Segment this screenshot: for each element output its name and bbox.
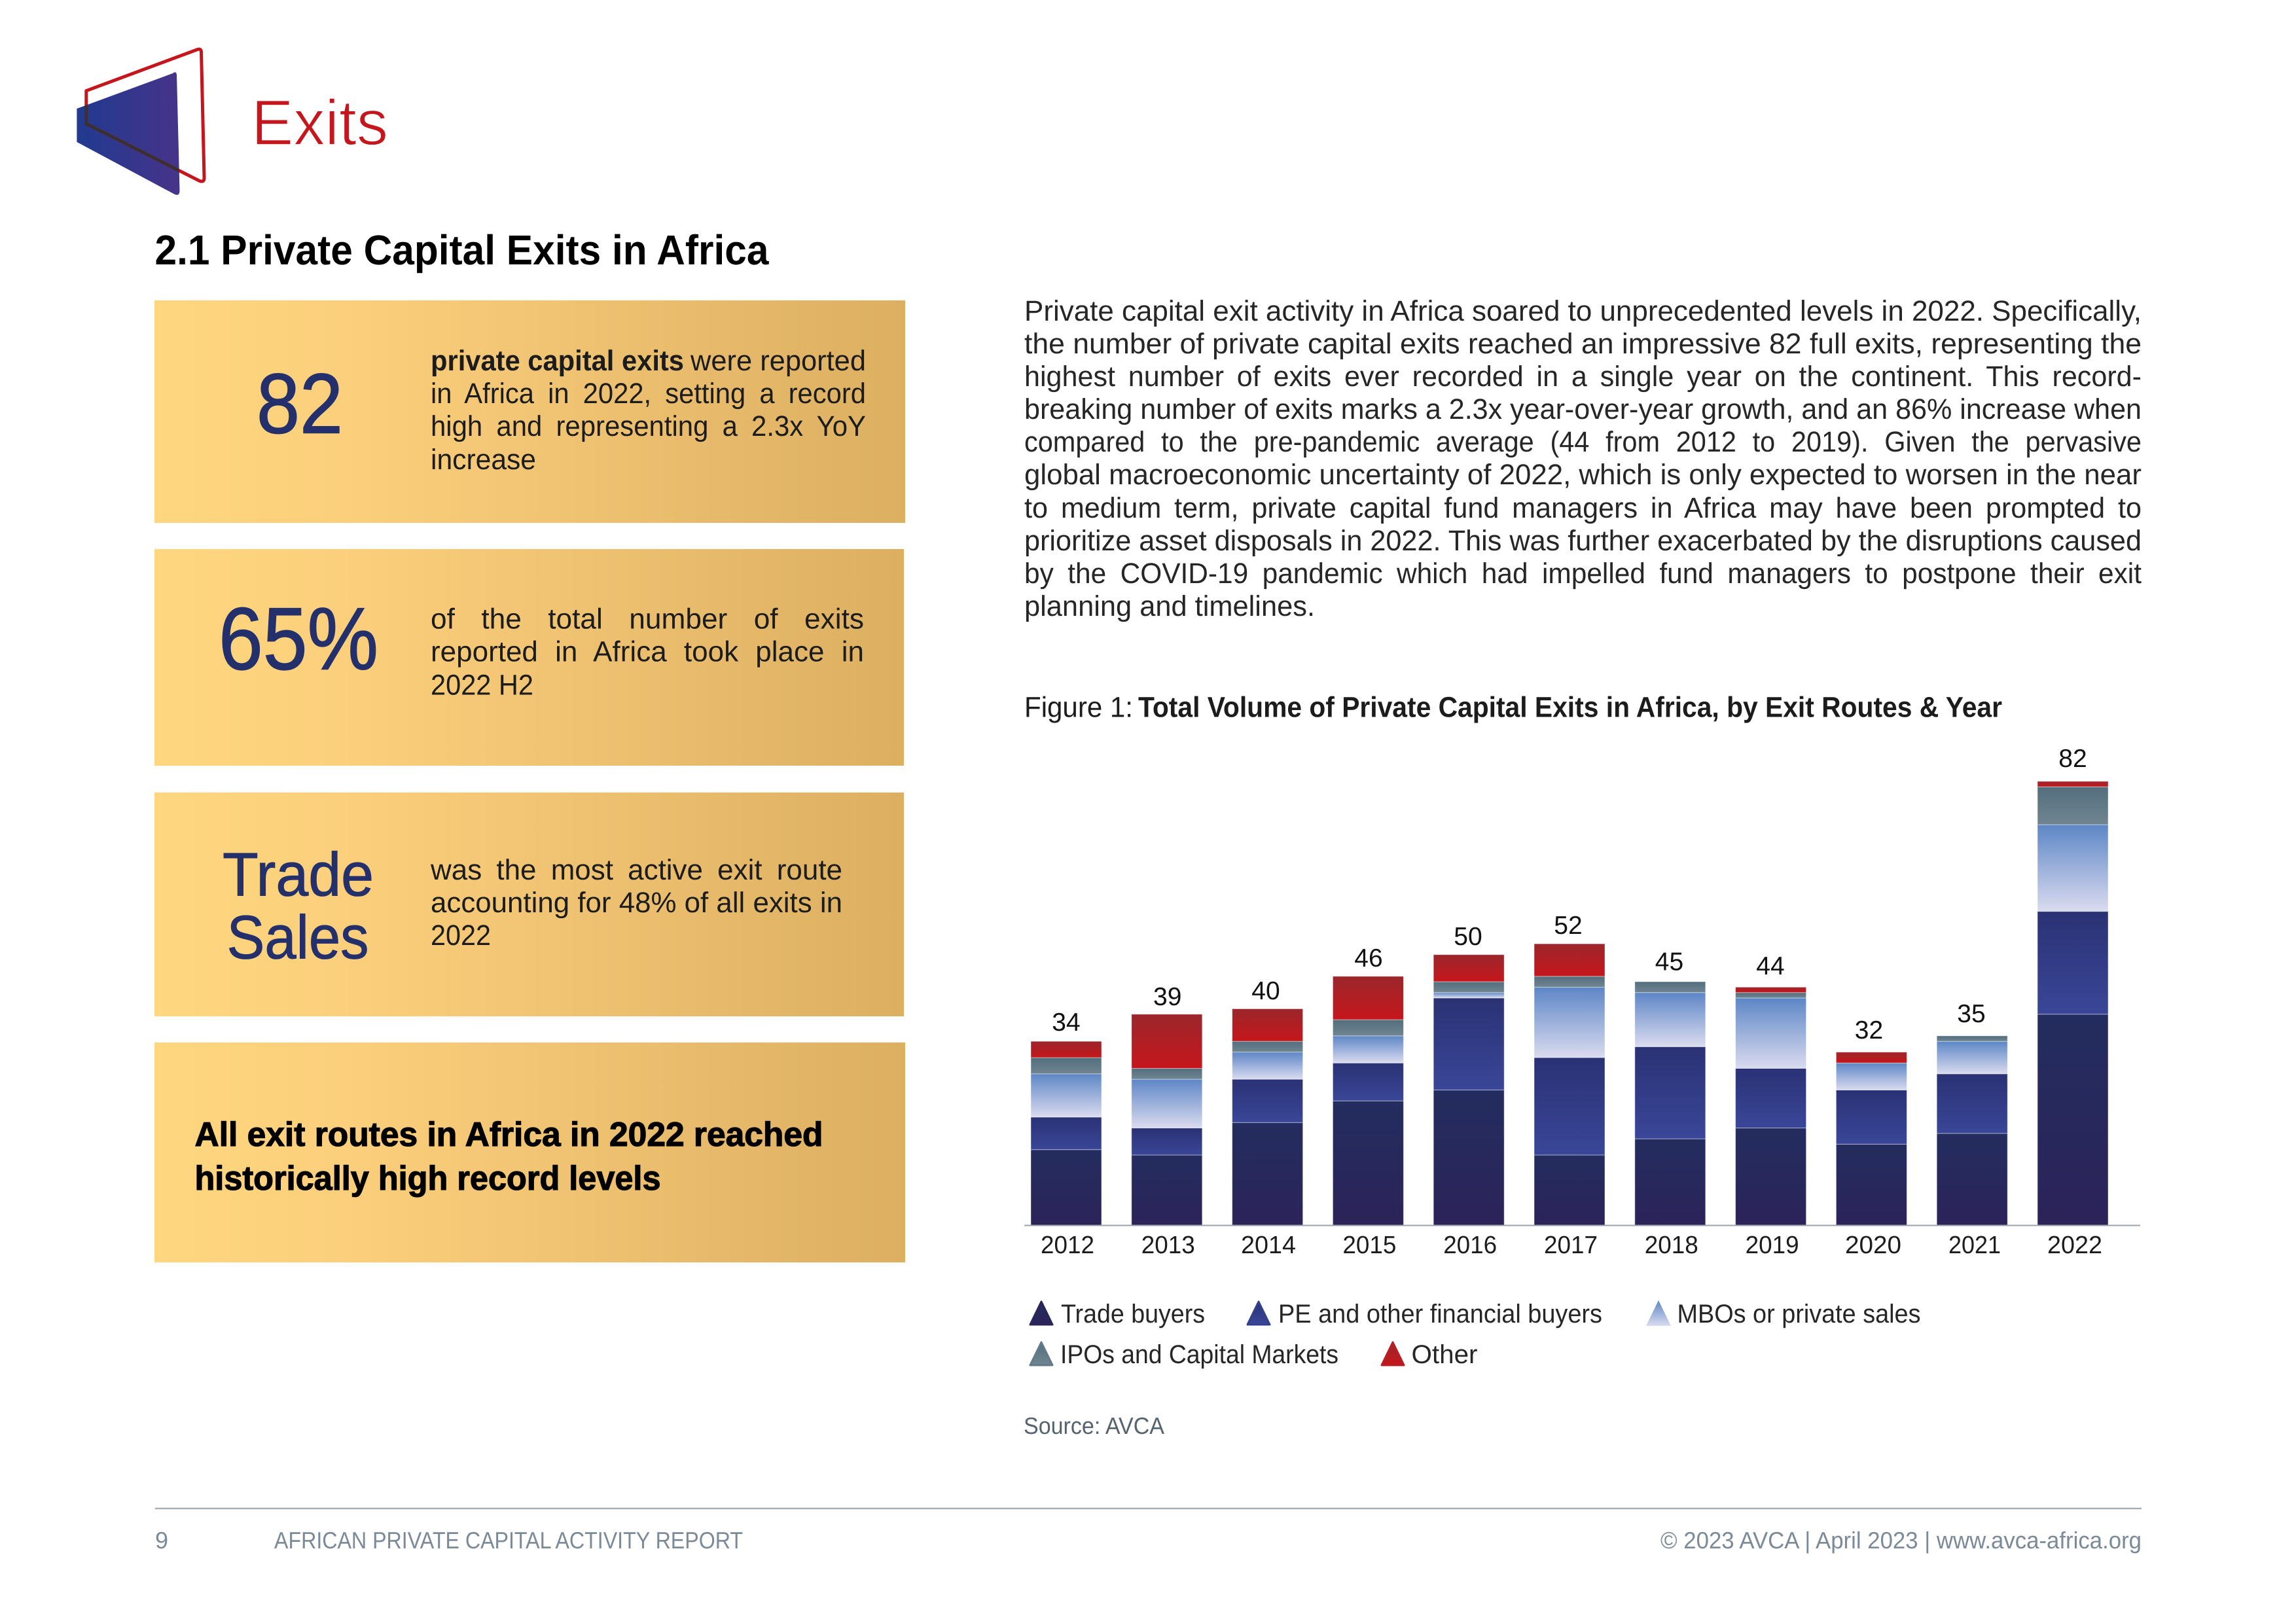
year axis labels: 2019 — [1746, 1232, 1799, 1259]
stacked bar chart — [1024, 745, 2140, 1259]
body text: highest number of exits ever recorded in a single year on the continent. This record- — [1024, 361, 2142, 393]
text: trade sales description — [430, 854, 842, 952]
year axis labels: 2014 — [1241, 1232, 1296, 1259]
year axis labels: 2016 — [1443, 1232, 1497, 1259]
bar 2019 — [1736, 987, 1806, 1226]
bar 2016 — [1433, 955, 1504, 1226]
figure title: Total Volume of Private Capital Exits in Africa, by Exit Routes & Year — [1138, 691, 2002, 724]
year axis labels: 2020 — [1845, 1232, 1901, 1259]
stat: trade sales: Sales — [226, 903, 369, 971]
text: trade sales description: 2022 — [431, 919, 491, 952]
stat: 65%: 65% — [219, 589, 378, 688]
panel: trade sales — [154, 793, 904, 1016]
year axis labels: 2022 — [2047, 1232, 2102, 1259]
body text: by the COVID-19 pandemic which had impelled fund managers to postpone their exit — [1024, 558, 2142, 590]
footer: page number: 9 — [155, 1527, 168, 1554]
stat: trade sales: Trade — [223, 840, 374, 908]
body text: prioritize asset disposals in 2022. This was further exacerbated by the disruptions caused — [1024, 525, 2142, 557]
panel: 82 exits — [154, 300, 905, 523]
year axis labels: 2012 — [1041, 1232, 1094, 1259]
year axis labels: 2015 — [1342, 1232, 1396, 1259]
bar 2014 — [1232, 1008, 1303, 1226]
icon: exits logo — [77, 49, 204, 195]
legend: PE and other financial buyers: PE and other financial buyers — [1278, 1300, 1602, 1329]
body text: to medium term, private capital fund managers in Africa may have been prompted to — [1024, 492, 2142, 524]
source note: Source: AVCA — [1024, 1412, 1164, 1439]
text: 82 description — [431, 345, 866, 476]
bar 2020 — [1836, 1052, 1907, 1226]
year axis labels: 2018 — [1645, 1232, 1698, 1259]
text: 82 description: high and representing a 2.3x YoY — [431, 410, 866, 442]
body text: Private capital exit activity in Africa soared to unprecedented levels in 2022. Specifically, — [1024, 295, 2142, 327]
bar value labels: 39 — [1153, 983, 1181, 1011]
body text: the number of private capital exits reached an impressive 82 full exits, representing the — [1024, 328, 2142, 360]
text: 65% description: of the total number of exits — [431, 603, 864, 635]
legend: trade buyers: Trade buyers — [1061, 1300, 1205, 1329]
bar 2017 — [1534, 944, 1605, 1226]
text: trade sales description: accounting for 48% of all exits in — [431, 887, 842, 919]
body text: compared to the pre-pandemic average (44 from 2012 to 2019). Given the pervasive — [1024, 426, 2142, 458]
bar value labels: 35 — [1957, 1000, 1986, 1028]
bar value labels: 40 — [1251, 977, 1280, 1005]
text: 65% description: reported in Africa took place in — [431, 636, 864, 668]
bar value labels: 82 — [2058, 745, 2087, 773]
title: Exits — [251, 86, 388, 158]
stat: 82: 82 — [257, 356, 343, 452]
year axis labels: 2021 — [1948, 1232, 2001, 1259]
bar value labels — [1052, 745, 2087, 1044]
body text — [1024, 295, 2142, 622]
legend: other — [1382, 1340, 1478, 1369]
bar value labels: 32 — [1855, 1016, 1883, 1044]
callout text — [195, 1116, 823, 1198]
figure title: Figure 1: — [1024, 691, 1133, 724]
body text: global macroeconomic uncertainty of 2022, which is only expected to worsen in the near — [1024, 459, 2142, 491]
panel: 65% — [154, 549, 904, 766]
panel: all exit routes callout — [154, 1043, 905, 1262]
text: 82 description: increase — [431, 444, 536, 476]
bar 2022 — [2037, 781, 2108, 1226]
text: trade sales description: was the most active exit route — [430, 854, 842, 886]
bar value labels: 52 — [1554, 912, 1583, 940]
text: 82 description: in Africa in 2022, setting a record — [431, 378, 866, 410]
legend: other: Other — [1411, 1340, 1478, 1369]
section heading: 2.1 Private Capital Exits in Africa — [154, 226, 769, 274]
year axis labels: 2013 — [1141, 1232, 1195, 1259]
text: 65% description — [431, 603, 864, 702]
callout text: All exit routes in Africa in 2022 reached — [195, 1116, 823, 1154]
bar value labels: 45 — [1655, 948, 1683, 976]
callout text: historically high record levels — [195, 1160, 661, 1198]
footer: report name: AFRICAN PRIVATE CAPITAL ACTIVITY REPORT — [274, 1527, 743, 1554]
legend: MBOs or private sales: MBOs or private sales — [1677, 1300, 1920, 1329]
bar 2021 — [1937, 1036, 2007, 1226]
bar 2012 — [1031, 1041, 1102, 1226]
bar value labels: 34 — [1052, 1008, 1081, 1037]
footer: copyright: © 2023 AVCA | April 2023 | www.avca-africa.org — [1660, 1527, 2142, 1554]
year axis labels — [1041, 1232, 2102, 1259]
text: 82 description: were reported — [690, 345, 866, 377]
year axis labels: 2017 — [1544, 1232, 1598, 1259]
bar 2013 — [1132, 1014, 1202, 1226]
bar value labels: 50 — [1454, 923, 1482, 951]
body text: breaking number of exits marks a 2.3x year-over-year growth, and an 86% increase when — [1024, 393, 2142, 425]
bar 2018 — [1635, 982, 1706, 1226]
legend — [1030, 1300, 1920, 1369]
text: 82 description: private capital exits — [431, 345, 684, 377]
text: 65% description: 2022 H2 — [431, 669, 533, 702]
bar value labels: 44 — [1756, 952, 1785, 980]
bar value labels: 46 — [1354, 944, 1383, 972]
bar 2015 — [1333, 976, 1403, 1226]
legend: IPOs and capital markets: IPOs and Capital Markets — [1060, 1340, 1338, 1369]
body text: planning and timelines. — [1024, 590, 1315, 622]
stat: trade sales — [223, 840, 374, 971]
